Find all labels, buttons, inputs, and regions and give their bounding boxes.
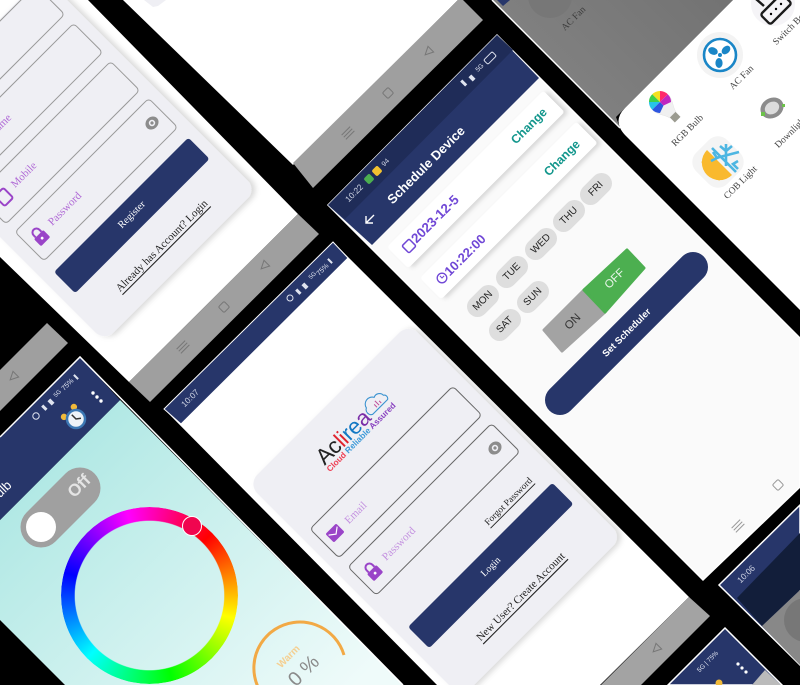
notification: yellow [371, 165, 383, 177]
placeholder: password: Password [46, 189, 85, 228]
icon: back [7, 371, 19, 383]
on/off switch [544, 250, 644, 351]
icon: lock [362, 560, 383, 581]
device: downlight [757, 93, 800, 151]
icon: alarm clock [716, 680, 722, 685]
panel: upper phone screen [123, 0, 458, 165]
status icons: 5G [474, 62, 486, 74]
icon: home [382, 87, 394, 99]
logo cloud [360, 388, 389, 416]
login card [248, 323, 622, 685]
status icons [287, 258, 333, 301]
dark content band [737, 533, 800, 626]
status time: 10:07 [179, 387, 201, 409]
login link: Already has Account? Login [114, 197, 211, 294]
icon: phone [0, 188, 13, 206]
panel: device list phone [492, 0, 800, 310]
icon: eye [143, 114, 161, 132]
navigation bar: upper phone [293, 0, 483, 188]
icon: menu dots [736, 662, 748, 674]
power toggle [26, 470, 95, 542]
warm label: Warm [275, 643, 303, 671]
placeholder: password: Password [380, 524, 419, 563]
day labels: SUN [522, 286, 544, 308]
day selector [471, 179, 606, 336]
icon: alarm clock [59, 402, 90, 433]
icon: lock [29, 225, 50, 246]
logo wordmark: Aclirea [311, 404, 376, 469]
status strip [328, 35, 513, 219]
set scheduler label: Set Scheduler [600, 306, 654, 360]
input field: name [0, 0, 65, 148]
input field: password [348, 423, 520, 595]
day labels: WED [529, 232, 553, 256]
phone corner [497, 0, 510, 6]
icon: back arrow [366, 215, 374, 223]
status bar: 75% [61, 378, 75, 392]
day labels: THU [558, 205, 580, 227]
card corner [144, 0, 166, 7]
status bar [164, 242, 348, 424]
status time: 10:22 [343, 182, 365, 204]
panel: bottom phone [668, 628, 782, 685]
icon: envelope [325, 523, 345, 543]
status bar: 5G [53, 389, 63, 399]
status icons: 5G [308, 271, 318, 281]
day labels: SAT [494, 314, 516, 336]
panel: 10:06 phone [719, 505, 800, 665]
time card [420, 122, 597, 299]
date card [387, 91, 564, 268]
device: AC fan [697, 32, 756, 92]
input field: password [15, 98, 178, 261]
navigation bar: login phone [601, 597, 710, 685]
icon: calendar [402, 239, 416, 253]
create account link: New User? Create Account [474, 550, 568, 644]
panel: register phone screen [0, 0, 298, 382]
white sheet [618, 0, 800, 310]
nav icon: home [772, 479, 784, 491]
off label: OFF [603, 267, 627, 291]
set scheduler button [560, 267, 693, 400]
device: RGB bulb [644, 86, 706, 149]
register button [54, 138, 210, 293]
colour wheel thumb [182, 516, 202, 536]
day labels [471, 179, 606, 336]
icon: clock [435, 271, 449, 285]
icon: menu dots [91, 391, 103, 403]
time value: 10:22:00 [441, 231, 489, 279]
device: switch board [751, 0, 800, 48]
colour wheel ring [61, 507, 238, 684]
header bar [328, 35, 539, 245]
input field: email [310, 386, 482, 558]
icon: eye [486, 439, 504, 457]
day labels: FRI [586, 179, 606, 199]
register label: Register [116, 199, 148, 231]
login button [408, 483, 573, 648]
icon: home [218, 301, 230, 313]
status icons [460, 52, 496, 87]
forgot password link: Forgot Password [483, 476, 535, 528]
day labels: TUE [501, 261, 523, 283]
status bar [33, 374, 79, 419]
panel: colour wheel phone [0, 357, 403, 685]
toggle label: Off [64, 470, 95, 501]
warmth dial [254, 622, 344, 685]
panel: login phone screen [164, 242, 689, 685]
grey content [762, 590, 800, 665]
left edge [492, 0, 620, 128]
on label: ON [563, 312, 583, 332]
register form card [0, 0, 257, 342]
date value: 2023-12-5 [408, 192, 462, 246]
COB label: COB Light [722, 164, 760, 202]
nav icon: menu [732, 520, 744, 532]
icon: back [422, 46, 434, 58]
navigation bar: register phone [129, 214, 319, 402]
logo [311, 388, 398, 474]
day labels: MON [471, 289, 495, 313]
icon: back [650, 643, 662, 655]
grey content corner [752, 670, 781, 685]
logo tagline: Cloud Reliable Assured [324, 400, 398, 474]
status time: 10:06 [735, 563, 757, 585]
header bar [0, 357, 120, 520]
input field: email [0, 23, 103, 186]
device: COB light [687, 131, 760, 202]
placeholder: email: Email [342, 499, 370, 527]
navigation bar: left phone [0, 323, 68, 411]
notification: text: 94 [381, 158, 391, 168]
status text: 5G | 75% [696, 650, 720, 674]
dim circle [784, 598, 800, 642]
login label: Login [479, 555, 503, 579]
placeholder: mobile: Mobile [9, 160, 39, 190]
RGB bulb label: RGB Bulb [670, 113, 706, 149]
icon: menu [342, 127, 354, 139]
AC fan label: AC Fan [728, 64, 756, 92]
status icons: 75% [316, 263, 330, 277]
change time: Change [541, 137, 583, 179]
icon: back [258, 260, 270, 272]
notification: green [363, 173, 375, 185]
panel: schedule device phone [328, 35, 800, 580]
dimmed device label: AC Fan [560, 5, 588, 33]
change date: Change [508, 105, 550, 147]
icon: menu [177, 341, 189, 353]
input field: mobile [0, 61, 140, 224]
dimmed device icon [528, 0, 572, 18]
top edge [0, 357, 403, 685]
screen title: Schedule Device [384, 123, 468, 207]
